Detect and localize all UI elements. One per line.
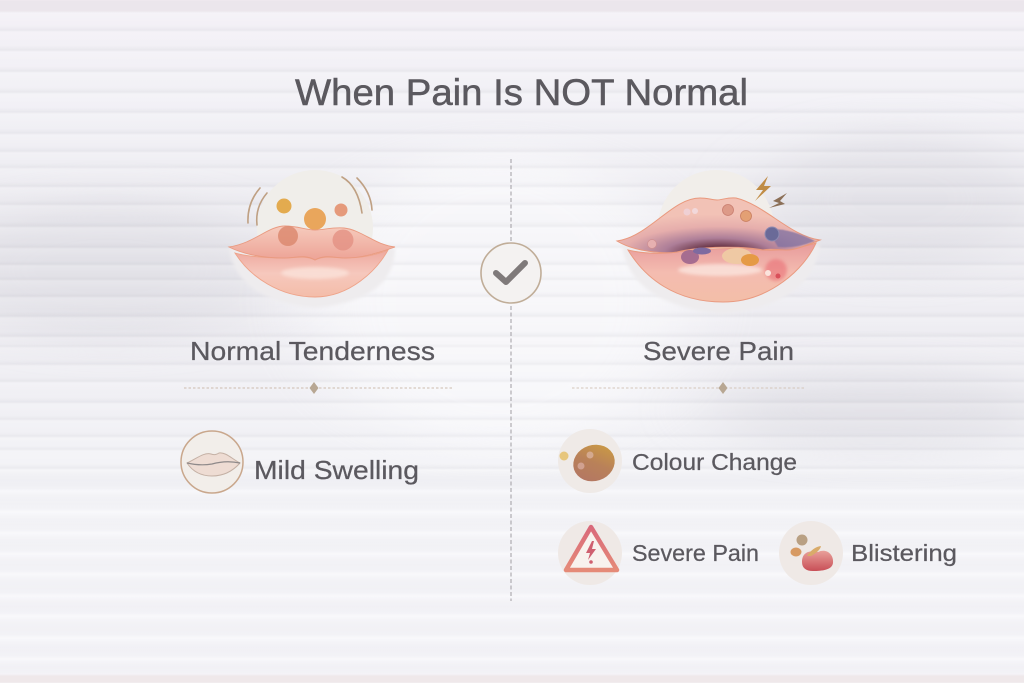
item: severe pain [558,521,759,585]
icon: lips outline [181,431,243,493]
item: severe pain: Severe Pain [632,540,759,566]
heading: normal tenderness: Normal Tenderness [190,336,435,366]
item: blistering: Blistering [851,540,957,566]
tenderness arcs [248,177,372,225]
divider: right [572,382,806,394]
lower lip [628,243,816,302]
upper lip [229,226,395,260]
center divider line [510,159,512,601]
icon: blisters [779,521,843,585]
item: colour change [558,429,797,493]
lightning bolts [755,176,771,201]
tender spots above lip [276,198,292,214]
tender spots on lip [278,226,298,246]
heading: severe pain: Severe Pain [643,336,794,366]
lip sores [722,204,734,216]
divider: left [184,382,452,394]
item: blistering [779,521,957,585]
item: colour change: Colour Change [632,449,797,475]
item: mild swelling [181,431,419,493]
icon: check badge [481,243,541,303]
upper lip [617,198,820,253]
icon: warning triangle [558,521,622,585]
lower lip [235,250,388,297]
illustration: normal lips [229,170,395,308]
icon: discoloured patch [558,429,622,493]
item: mild swelling: Mild Swelling [254,455,419,485]
title: When Pain Is NOT Normal [295,72,748,113]
illustration: severe lips [617,170,820,314]
